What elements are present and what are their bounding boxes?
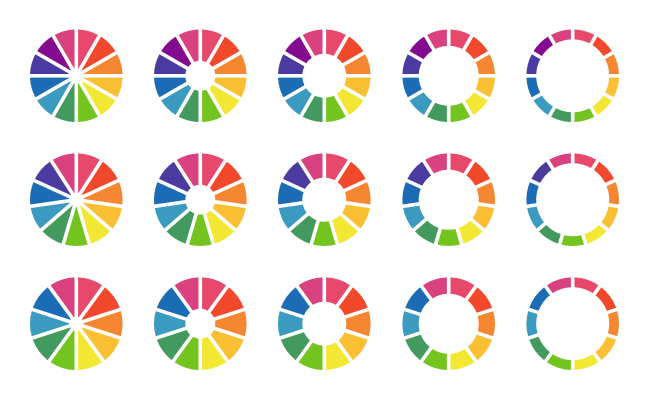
segment: blue xyxy=(273,67,306,97)
segment: amber xyxy=(210,203,246,230)
segment: red xyxy=(336,37,366,69)
segment: green xyxy=(165,206,195,244)
segment: purple xyxy=(410,34,436,61)
segment: green xyxy=(303,96,322,122)
segment: teal xyxy=(26,186,70,229)
segment: rose xyxy=(326,30,346,56)
segment: indigo xyxy=(278,54,304,74)
segment: teal xyxy=(34,71,71,115)
segment: green xyxy=(413,218,440,244)
segment: yellow xyxy=(201,84,239,118)
segment: green xyxy=(28,314,71,360)
segment: pink xyxy=(179,25,212,63)
wheel: row 1 column 5, twelve segments, thin ring xyxy=(522,25,624,127)
segment: orange xyxy=(213,54,251,88)
segment: lime xyxy=(56,207,88,251)
segment: blue xyxy=(522,73,544,97)
segment: rose xyxy=(78,30,98,69)
segment: amber xyxy=(80,202,122,230)
segment: orange xyxy=(343,311,376,342)
wheel: row 3 column 3, ten segments, wide ring xyxy=(272,271,376,376)
segment: red xyxy=(336,162,369,196)
segment: orange xyxy=(602,54,624,78)
segment: purple xyxy=(37,34,81,71)
segment: amber xyxy=(340,204,370,230)
segment: yellow xyxy=(71,81,115,118)
segment: red xyxy=(465,287,497,318)
segment: green xyxy=(179,90,198,122)
segment: amber xyxy=(601,206,618,230)
segment: teal xyxy=(397,307,424,336)
segment: yellow xyxy=(59,330,102,376)
segment: blue xyxy=(405,285,433,314)
segment: orange xyxy=(83,54,127,91)
wheel: row 2 column 3, eleven segments, wide ring xyxy=(274,148,376,251)
wheel: row 2 column 4, eleven segments, medium ring xyxy=(398,148,501,251)
segment: amber xyxy=(83,78,123,97)
segment: red xyxy=(337,287,372,324)
segment: indigo xyxy=(531,159,554,185)
segment: lime xyxy=(299,342,322,370)
segment: lime xyxy=(175,337,198,370)
segment: blue xyxy=(27,177,69,205)
segment: pink xyxy=(299,271,334,307)
wheel: row 1 column 1, twelve segments, small hole xyxy=(25,25,127,127)
segment: green xyxy=(289,212,317,244)
segment: blue xyxy=(398,71,425,97)
segment: red xyxy=(464,162,493,190)
segment: teal xyxy=(531,93,555,115)
segment: indigo xyxy=(407,159,435,187)
segment: pink xyxy=(547,271,576,298)
segment: blue xyxy=(157,285,196,318)
segment: lime xyxy=(182,213,212,251)
segment: blue xyxy=(524,181,541,205)
segment: amber xyxy=(344,78,371,97)
segment: green xyxy=(55,83,74,122)
segment: yellow xyxy=(461,91,488,118)
segment: orange xyxy=(473,311,501,340)
segment: amber xyxy=(75,327,120,362)
segment: blue xyxy=(281,285,314,316)
segment: green xyxy=(276,324,312,360)
wheel: row 3 column 5, ten segments, thin ring xyxy=(521,271,625,376)
wheel: row 1 column 4, twelve segments, medium ring xyxy=(398,25,500,127)
segment: pink xyxy=(427,25,454,52)
segment: blue xyxy=(149,64,187,97)
segment: lime xyxy=(570,105,594,127)
segment: blue xyxy=(33,285,78,320)
segment: amber xyxy=(205,329,244,362)
segment: lime xyxy=(307,219,336,251)
segment: pink xyxy=(301,148,334,182)
segment: purple xyxy=(534,34,555,58)
wheel: row 2 column 2, eleven segments, medium hole xyxy=(150,148,252,251)
segment: orange xyxy=(83,182,128,218)
segment: blue xyxy=(529,285,552,313)
segment: teal xyxy=(272,305,306,336)
wheel: row 1 column 2, twelve segments, medium hole xyxy=(149,25,251,127)
segment: blue xyxy=(275,179,305,205)
segment: purple xyxy=(161,34,199,67)
segment: rose xyxy=(574,153,596,168)
segment: rose xyxy=(78,153,100,193)
segment: red xyxy=(81,162,121,207)
wheel: row 1 column 3, twelve segments, wide ring xyxy=(273,25,375,127)
segment: rose xyxy=(202,277,226,311)
segment: lime xyxy=(434,225,460,251)
segment: indigo xyxy=(159,159,198,192)
segment: amber xyxy=(334,331,368,362)
wheel: row 3 column 1, ten segments, small hole xyxy=(24,271,128,376)
segment: teal xyxy=(522,203,548,229)
segment: pink xyxy=(55,25,92,69)
segment: lime xyxy=(559,231,584,251)
segment: red xyxy=(209,162,245,201)
segment: red xyxy=(592,287,621,314)
segment: green xyxy=(525,333,553,360)
segment: orange xyxy=(602,311,625,339)
segment: pink xyxy=(549,148,575,172)
segment: teal xyxy=(521,309,543,336)
segment: purple xyxy=(285,34,318,64)
segment: yellow xyxy=(324,214,358,248)
segment: blue xyxy=(151,178,187,205)
segment: rose xyxy=(326,153,348,180)
segment: red xyxy=(209,37,242,75)
segment: yellow xyxy=(187,335,226,376)
segment: pink xyxy=(425,148,454,177)
segment: lime xyxy=(547,354,571,370)
segment: amber xyxy=(465,333,492,362)
segment: rose xyxy=(202,153,224,186)
segment: lime xyxy=(443,100,470,127)
segment: pink xyxy=(175,271,213,312)
segment: rose xyxy=(574,30,594,43)
segment: rose xyxy=(202,30,222,62)
segment: amber xyxy=(476,78,495,97)
segment: red xyxy=(590,37,615,58)
segment: yellow xyxy=(570,349,598,376)
segment: teal xyxy=(158,77,192,115)
segment: green xyxy=(152,319,191,360)
segment: pink xyxy=(53,148,92,193)
segment: yellow xyxy=(590,94,612,118)
segment: amber xyxy=(594,335,616,362)
segment: green xyxy=(427,103,447,122)
segment: blue xyxy=(25,60,70,97)
segment: rose xyxy=(450,30,470,49)
segment: green xyxy=(537,223,562,244)
segment: amber xyxy=(214,78,247,97)
segment: yellow xyxy=(453,218,482,248)
segment: indigo xyxy=(35,159,80,195)
segment: yellow xyxy=(581,222,606,248)
segment: orange xyxy=(602,182,625,208)
segment: red xyxy=(591,162,617,186)
segment: orange xyxy=(473,54,500,81)
segment: rose xyxy=(574,277,598,293)
segment: orange xyxy=(473,182,501,210)
segment: teal xyxy=(282,82,313,115)
segment: yellow xyxy=(66,205,110,248)
segment: blue xyxy=(400,180,423,205)
segment: orange xyxy=(83,311,128,346)
segment: amber xyxy=(471,205,494,230)
wheel: row 2 column 5, eleven segments, thin ring xyxy=(522,148,625,251)
segment: green xyxy=(401,329,432,360)
segment: red xyxy=(209,287,248,328)
segment: green xyxy=(41,199,73,244)
segment: orange xyxy=(213,311,252,344)
segment: teal xyxy=(24,301,70,336)
wheel: row 2 column 1, eleven segments, small hole xyxy=(26,148,128,251)
segment: indigo xyxy=(30,54,70,74)
segment: red xyxy=(82,287,124,334)
segment: lime xyxy=(51,330,74,370)
segment: red xyxy=(81,37,118,81)
segment: pink xyxy=(51,271,93,317)
segment: yellow xyxy=(443,345,474,376)
segment: green xyxy=(551,108,571,122)
segment: yellow xyxy=(331,87,363,118)
segment: indigo xyxy=(402,54,422,74)
segment: lime xyxy=(423,349,447,370)
segment: yellow xyxy=(315,340,350,376)
wheel: row 3 column 4, ten segments, medium ring xyxy=(397,271,501,376)
segment: teal xyxy=(150,191,189,229)
segment: teal xyxy=(407,88,434,115)
segment: indigo xyxy=(154,54,187,74)
segment: rose xyxy=(450,153,472,174)
segment: orange xyxy=(342,54,375,85)
segment: teal xyxy=(398,199,428,229)
segment: rose xyxy=(78,277,102,317)
segment: teal xyxy=(274,195,308,229)
segment: rose xyxy=(450,277,474,298)
segment: lime xyxy=(189,89,222,127)
segment: yellow xyxy=(195,210,234,248)
segment: indigo xyxy=(526,54,540,74)
segment: pink xyxy=(423,271,455,302)
segment: red xyxy=(464,37,491,63)
segment: teal xyxy=(148,303,187,336)
segment: pink xyxy=(551,25,575,47)
segment: pink xyxy=(303,25,333,58)
segment: lime xyxy=(61,83,98,127)
segment: lime xyxy=(316,94,346,127)
wheel: row 3 column 2, ten segments, medium hole xyxy=(148,271,252,376)
segment: amber xyxy=(605,78,619,97)
segment: pink xyxy=(177,148,213,187)
segment: indigo xyxy=(283,159,316,190)
segment: rose xyxy=(326,277,350,305)
segment: orange xyxy=(343,182,376,213)
segment: orange xyxy=(213,182,252,215)
